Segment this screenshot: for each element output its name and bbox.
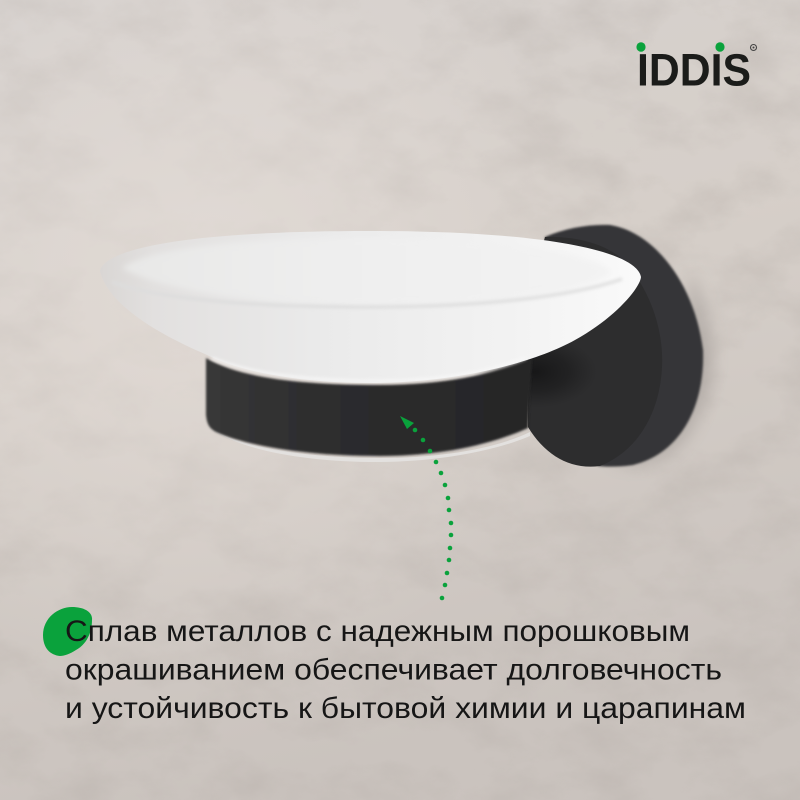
arrowhead [400, 416, 414, 429]
dish rim line [112, 279, 622, 307]
soap dish holder [100, 225, 712, 467]
dish lip above ring [212, 358, 525, 381]
green accent blob [43, 607, 92, 656]
caption text: окрашиванием обеспечивает долговечность [65, 654, 722, 686]
metal ring [206, 358, 532, 456]
mount neck [528, 237, 662, 467]
wall mount plate [545, 225, 703, 467]
frosted glass dish [100, 231, 641, 383]
logo: IDDIS: IDDIS [637, 44, 751, 96]
dish inner bowl [122, 238, 612, 305]
caption text [65, 615, 746, 725]
shadow under dish [473, 336, 597, 408]
caption text: и устойчивость к бытовой химии и царапинам [65, 692, 746, 725]
caption text: Сплав металлов с надежным порошковым [65, 615, 690, 648]
glass under ring [210, 428, 530, 462]
dotted arrow [400, 416, 453, 600]
wall shadow [610, 270, 712, 465]
